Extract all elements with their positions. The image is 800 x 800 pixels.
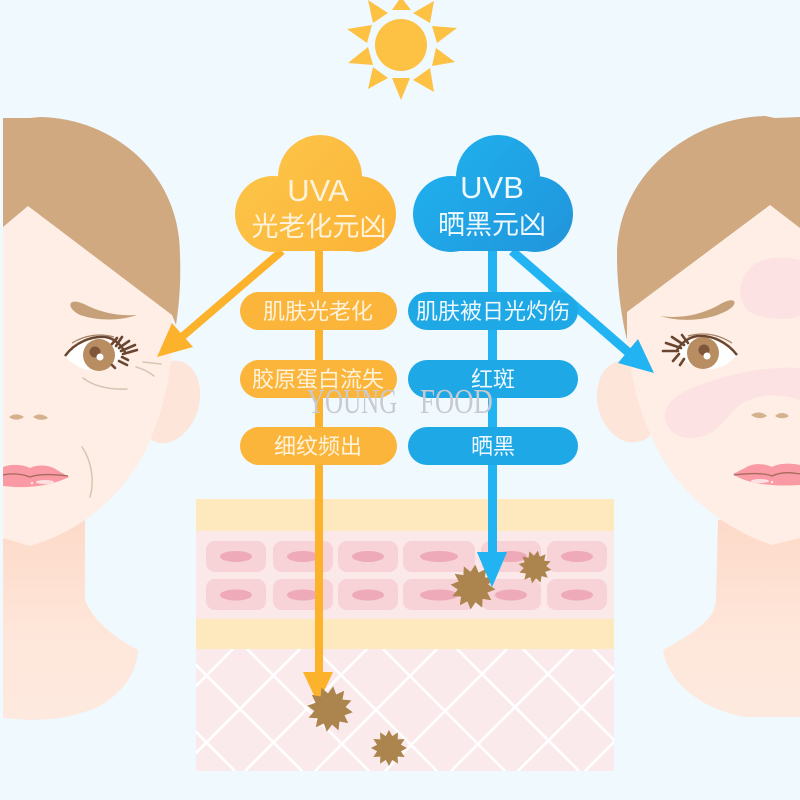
dermis lattice xyxy=(196,649,614,771)
panel: left aged face xyxy=(3,117,200,720)
ear xyxy=(597,361,651,442)
pill: sunburn: 肌肤被日光灼伤 xyxy=(416,299,570,324)
damage star: dermis large xyxy=(304,683,356,735)
cloud: UVB xyxy=(413,135,573,252)
panel: right sun-damaged face xyxy=(597,116,800,717)
wrinkles xyxy=(82,362,161,497)
arrowhead: UVB over star xyxy=(477,552,507,587)
lips xyxy=(3,465,69,487)
skin layer: top yellow xyxy=(196,499,614,531)
pill: tanning: 晒黑 xyxy=(471,434,515,459)
pill: fine lines xyxy=(240,427,397,465)
hair xyxy=(617,116,800,340)
damage star: epidermis large xyxy=(448,562,498,612)
arrow: UVB diagonal to right face xyxy=(509,248,654,373)
skin layer: pink cells xyxy=(196,531,614,619)
UVB subtitle: 晒黑元凶 xyxy=(438,210,546,240)
pill: photoaging xyxy=(240,292,397,330)
arrow: UVB vertical into epidermis xyxy=(477,245,507,587)
spot: forehead xyxy=(740,258,800,319)
UVA effects pills xyxy=(240,292,397,465)
pill: sunburn xyxy=(408,292,578,330)
UVB title: UVB xyxy=(460,170,524,205)
watermark: YOUNG xyxy=(307,382,397,421)
pill: collagen loss: 胶原蛋白流失 xyxy=(252,367,384,392)
cell nuclei xyxy=(220,551,593,600)
nose xyxy=(9,414,48,420)
pill: erythema xyxy=(408,360,578,398)
damage star: epidermis small xyxy=(516,548,554,586)
eye xyxy=(65,335,137,371)
pill: erythema: 红斑 xyxy=(471,367,515,392)
UVB effects pills xyxy=(408,292,578,465)
hair xyxy=(3,117,180,325)
watermark: FOOD xyxy=(420,382,493,421)
UVA subtitle: 光老化元凶 xyxy=(252,212,386,242)
face xyxy=(3,206,172,546)
panel: skin cross-section xyxy=(196,499,614,771)
watermark xyxy=(307,382,493,421)
icon: sun xyxy=(347,0,457,100)
lips xyxy=(733,464,800,486)
face xyxy=(627,205,800,545)
neck xyxy=(3,520,138,720)
pill: collagen loss xyxy=(240,360,397,398)
pill: photoaging: 肌肤光老化 xyxy=(263,299,373,324)
skin layer: dermis xyxy=(196,649,614,771)
cells xyxy=(206,541,607,610)
spot: cheeks band xyxy=(665,368,800,438)
arrow: UVA vertical into dermis xyxy=(303,245,333,704)
arrow: UVA diagonal to left face xyxy=(157,248,285,357)
cloud: UVA xyxy=(235,135,396,252)
neck xyxy=(663,520,800,717)
eyebrow xyxy=(660,300,734,320)
eye xyxy=(663,334,737,369)
ear xyxy=(149,361,200,443)
pill: tanning xyxy=(408,427,578,465)
nose xyxy=(751,412,789,418)
eyebrow xyxy=(70,302,137,320)
skin layer: lower yellow xyxy=(196,619,614,649)
UVA title: UVA xyxy=(287,173,349,208)
damage star: dermis small xyxy=(371,730,407,766)
pill: fine lines: 细纹频出 xyxy=(274,434,362,459)
